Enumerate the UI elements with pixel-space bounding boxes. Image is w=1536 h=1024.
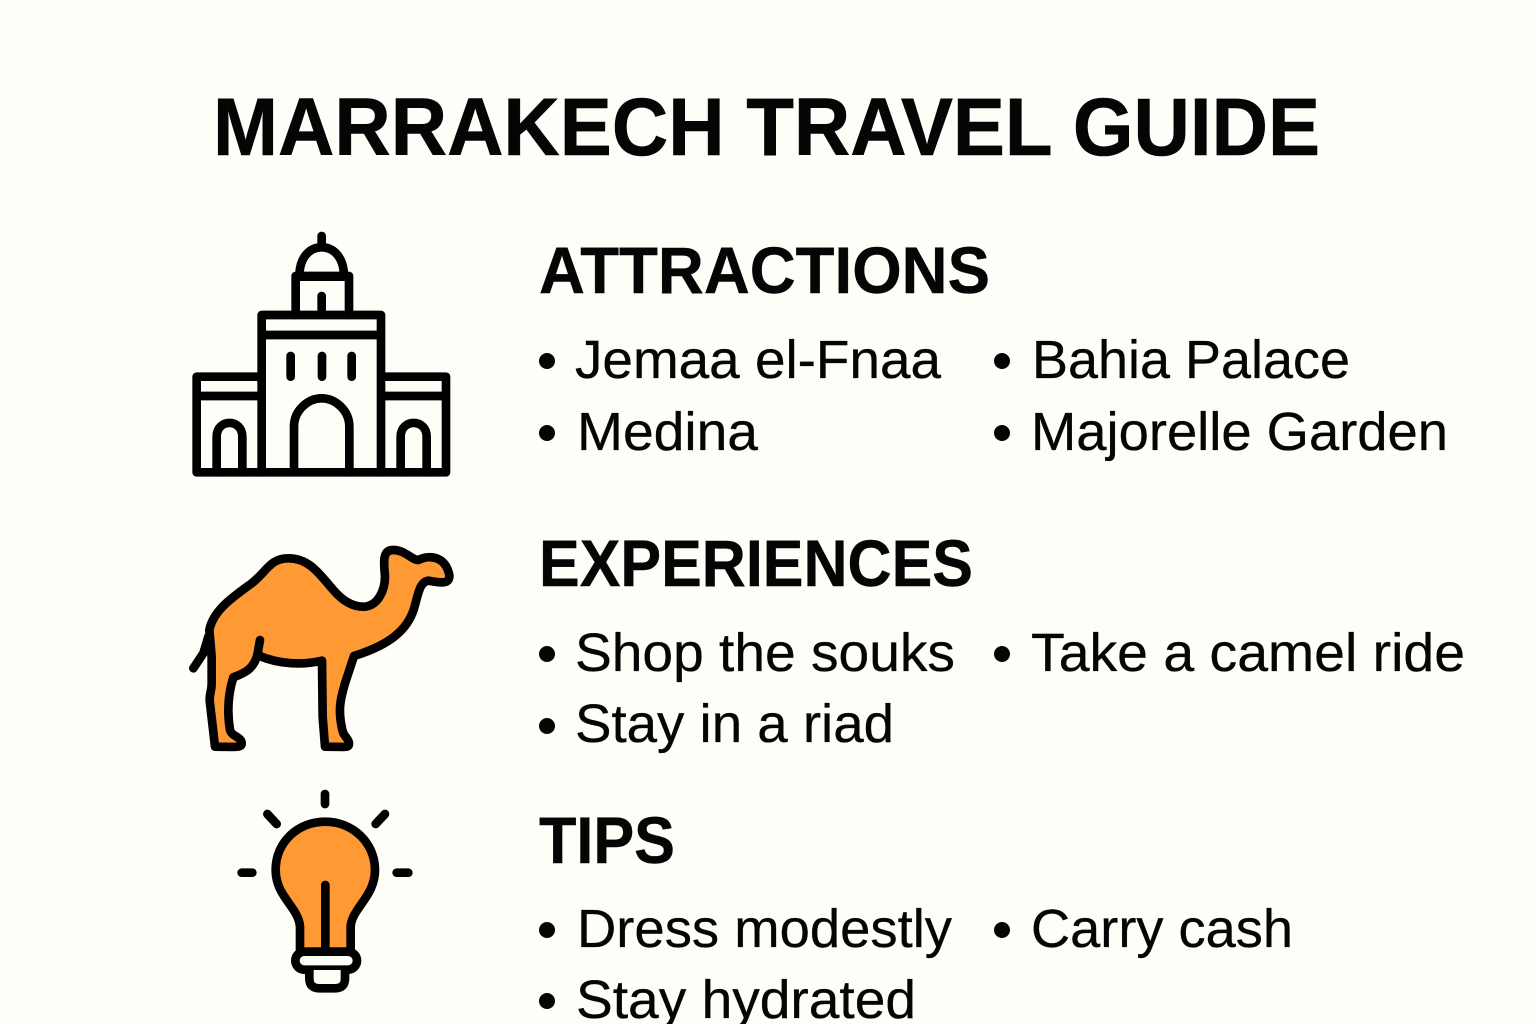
list: attractions items <box>539 330 1448 462</box>
icon: light bulb <box>242 794 408 988</box>
icon: palace building <box>197 236 446 472</box>
list: experiences items: Stay in a riad <box>575 694 894 754</box>
list: attractions items: Medina <box>577 402 759 462</box>
list: tips items <box>539 899 1293 1024</box>
list: attractions items: Bahia Palace <box>1032 330 1350 390</box>
panel: experiences <box>193 526 1465 754</box>
heading: experiences: EXPERIENCES <box>539 526 973 600</box>
panel: attractions <box>197 233 1448 472</box>
list: tips items: Carry cash <box>1031 899 1293 959</box>
heading: tips: TIPS <box>539 803 675 877</box>
panel: tips <box>242 794 1293 1024</box>
list: attractions items: Majorelle Garden <box>1031 402 1448 462</box>
heading: attractions: ATTRACTIONS <box>539 233 990 307</box>
list: attractions items: Jemaa el-Fnaa <box>575 330 942 390</box>
list: experiences items: Take a camel ride <box>1031 623 1465 683</box>
title: MARRAKECH TRAVEL GUIDE <box>213 82 1320 173</box>
list: tips items: Dress modestly <box>577 899 952 959</box>
list: experiences items <box>539 623 1465 754</box>
list: experiences items: Shop the souks <box>575 623 955 683</box>
icon: camel <box>193 550 449 747</box>
